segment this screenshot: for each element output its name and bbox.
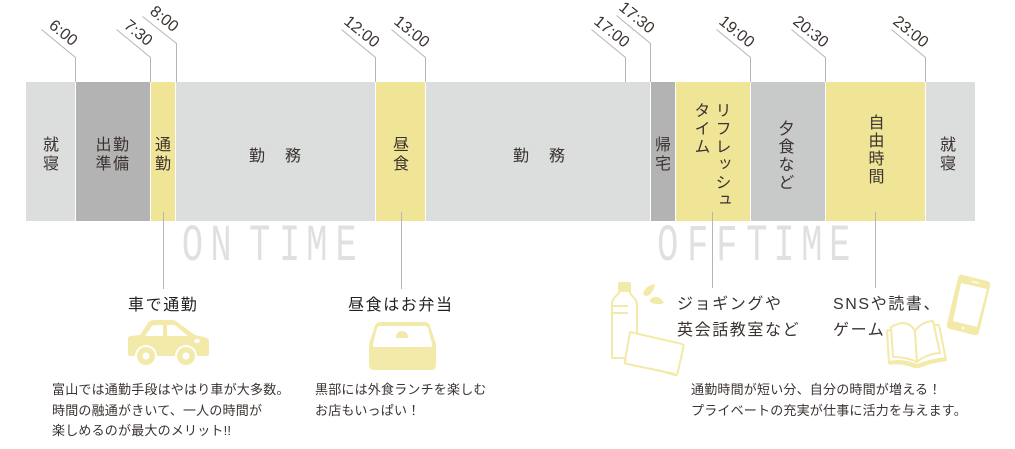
segment labels	[43, 102, 956, 210]
OFFTIME watermark: OFFTIME	[657, 218, 850, 276]
segment labels: 宅	[655, 155, 671, 173]
icon: bottle and towel	[612, 282, 684, 375]
segment labels: リフレッシュ	[712, 102, 730, 210]
segment labels: 夕食など	[776, 120, 794, 192]
time labels: 20:30	[789, 13, 831, 51]
icon: open book	[887, 321, 947, 368]
segment labels: 就	[43, 136, 59, 154]
segment labels: タイム	[692, 102, 710, 156]
icon: bento box	[369, 322, 436, 370]
segment labels: 就	[940, 136, 956, 154]
time labels: 7:30	[120, 17, 155, 50]
text: bento: お店もいっぱい！	[315, 403, 420, 418]
text: car commute: 富山では通勤手段はやはり車が大多数。	[52, 382, 290, 397]
segment labels: 出勤	[95, 136, 131, 154]
heading: jogging: ジョギングや	[677, 295, 783, 313]
text: car commute: 時間の融通がきいて、一人の時間が	[52, 403, 262, 418]
text: car commute	[52, 382, 290, 438]
time labels	[45, 0, 931, 51]
segment labels: 通	[155, 136, 171, 154]
heading: SNS: ゲーム	[833, 321, 885, 339]
heading: car commute: 車で通勤	[128, 296, 198, 314]
text: off-time note: プライベートの充実が仕事に活力を与えます。	[691, 403, 967, 418]
time labels: 8:00	[146, 3, 181, 36]
segment labels: 準備	[95, 155, 131, 173]
segment labels: 寝	[940, 155, 956, 173]
time labels: 12:00	[340, 13, 382, 51]
segment labels: 寝	[43, 155, 59, 173]
heading: SNS	[833, 295, 941, 339]
text: car commute: 楽しめるのが最大のメリット!!	[52, 423, 231, 438]
segment labels: 勤務	[513, 147, 585, 165]
segment labels: 勤務	[249, 147, 321, 165]
text: bento	[315, 382, 487, 418]
time labels: 19:00	[715, 13, 757, 51]
heading: jogging: 英会話教室など	[677, 321, 800, 339]
time labels: 17:30	[615, 0, 657, 37]
text: off-time note: 通勤時間が短い分、自分の時間が増える！	[691, 382, 941, 397]
time labels: 6:00	[45, 17, 80, 50]
icon: car	[128, 320, 209, 367]
segment labels: 自由時間	[866, 114, 884, 186]
time labels: 13:00	[390, 13, 432, 51]
heading: SNS: SNSや読書、	[833, 295, 941, 313]
segment labels: 食	[393, 155, 409, 173]
connector lines	[164, 212, 876, 289]
segment labels: 昼	[393, 136, 409, 154]
segment labels: 勤	[155, 155, 171, 173]
timeline bar	[26, 82, 975, 221]
time labels: 17:00	[590, 13, 632, 51]
text: bento: 黒部には外食ランチを楽しむ	[315, 382, 487, 397]
time labels: 23:00	[889, 13, 931, 51]
segment labels: 帰	[655, 136, 671, 154]
ON TIME watermark: ONTIME	[182, 218, 357, 276]
heading: jogging	[677, 295, 800, 339]
time ticks	[42, 16, 926, 82]
icon: smartphone	[947, 275, 990, 335]
text: off-time note	[691, 382, 967, 418]
heading: bento: 昼食はお弁当	[348, 296, 454, 314]
